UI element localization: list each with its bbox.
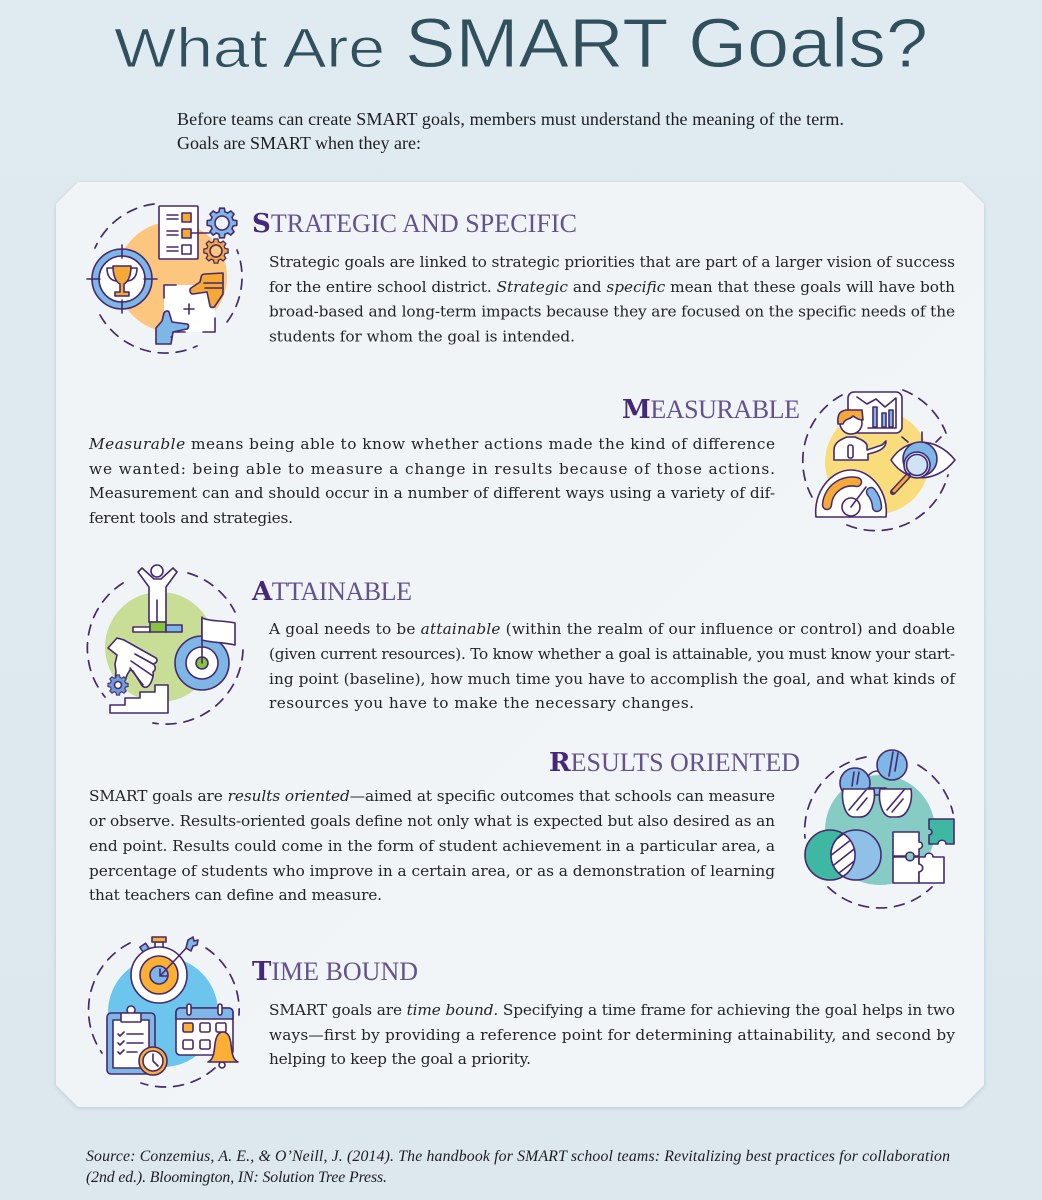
text block: strategic and specific <box>269 253 955 346</box>
text block: attainable <box>268 620 956 712</box>
icon: stopwatch target, clipboard and calendar <box>89 937 239 1087</box>
section: time bound <box>89 937 955 1087</box>
title <box>114 4 928 82</box>
intro text: Before teams can create SMART goals, members must understand the meaning of the term. <box>177 109 844 129</box>
intro text <box>177 109 844 153</box>
text block: attainable: ing point (baseline), how much time you have to accomplish the goal, and what kinds of <box>269 670 956 688</box>
intro text: Goals are SMART when they are: <box>177 133 421 153</box>
icon: goal checklist and trophy target <box>87 204 242 353</box>
icon: glasses, venn diagram and puzzle <box>805 750 954 908</box>
section: attainable <box>87 565 956 724</box>
text block: time bound: helping to keep the goal a priority. <box>269 1050 531 1068</box>
text block: measurable: we wanted: being able to measure a change in results because of those actions. <box>89 460 775 478</box>
source citation: Source: Conzemius, A. E., & O’Neill, J. (2014). The handbook for SMART school teams: Revitalizing best practices for collaboration <box>86 1148 950 1165</box>
text block: measurable: Measurable means being able to know whether actions made the kind of difference <box>88 435 775 453</box>
section: results oriented <box>89 748 954 908</box>
heading: strategic and specific: STRATEGIC AND SPECIFIC <box>252 209 577 239</box>
text block: attainable: resources you have to make the necessary changes. <box>269 694 694 712</box>
section: measurable <box>88 390 955 531</box>
text block: time bound <box>269 1001 955 1068</box>
text block: measurable: Measurement can and should occur in a number of different ways using a variety of dif- <box>89 484 775 502</box>
icon: climbing stairs and target flag <box>87 565 243 724</box>
panel: definitions card <box>56 182 984 1107</box>
text block: results oriented: SMART goals are results oriented—aimed at specific outcomes that schools can measure <box>89 787 775 805</box>
text block: strategic and specific: for the entire school district. Strategic and specific mean that these goals will have both <box>269 278 955 296</box>
icon: chart, eye and gauge <box>803 390 955 531</box>
heading: attainable: ATTAINABLE <box>251 577 412 607</box>
text block: measurable: ferent tools and strategies. <box>89 509 293 527</box>
text block: strategic and specific: students for whom the goal is intended. <box>269 328 575 346</box>
text block: results oriented: end point. Results could come in the form of student achievement in a particular area, a <box>89 837 775 855</box>
section: strategic and specific <box>87 204 955 353</box>
text block: attainable: (given current resources). To know whether a goal is attainable, you must know your start- <box>269 645 955 663</box>
text block: results oriented: percentage of students who improve in a certain area, or as a demonstration of learning <box>89 862 775 880</box>
text block: results oriented: or observe. Results-oriented goals define not only what is expected but also desired as an <box>89 812 775 830</box>
text block: strategic and specific: broad-based and long-term impacts because they are focused on the specific needs of the <box>269 302 955 320</box>
text block: results oriented <box>89 787 775 904</box>
source citation: (2nd ed.). Bloomington, IN: Solution Tree Press. <box>86 1169 387 1186</box>
title: What Are <box>114 16 385 79</box>
text block: time bound: SMART goals are time bound. Specifying a time frame for achieving the goal helps in two <box>269 1001 955 1019</box>
text block: time bound: ways—first by providing a reference point for determining attainability, and second by <box>269 1026 955 1044</box>
heading: time bound: TIME BOUND <box>252 957 418 987</box>
source citation <box>86 1148 950 1186</box>
heading: results oriented: RESULTS ORIENTED <box>549 748 800 778</box>
text block: strategic and specific: Strategic goals are linked to strategic priorities that are part of a larger vision of success <box>269 253 955 271</box>
text block: attainable: A goal needs to be attainable (within the realm of our influence or control) and doable <box>268 620 955 638</box>
title: SMART Goals? <box>405 4 928 82</box>
heading: measurable: MEASURABLE <box>622 395 800 425</box>
text block: measurable <box>88 435 775 527</box>
text block: results oriented: that teachers can define and measure. <box>89 886 382 904</box>
